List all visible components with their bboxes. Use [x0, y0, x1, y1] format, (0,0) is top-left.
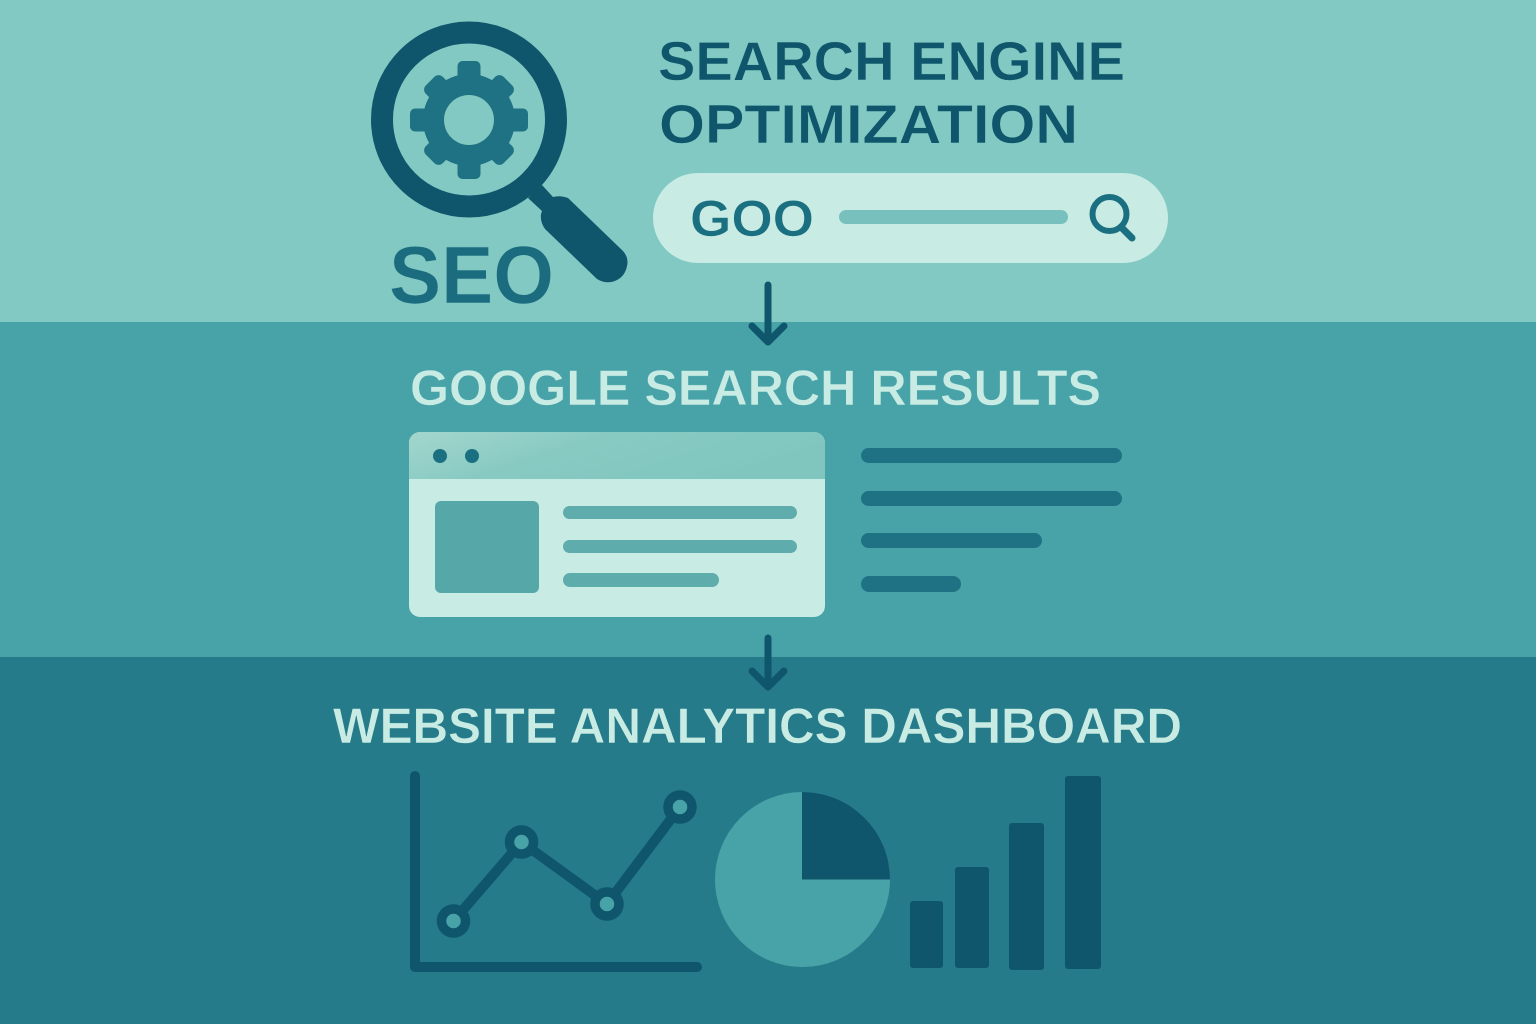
pie chart [715, 792, 890, 967]
arrow: results to analytics [752, 638, 784, 687]
title: search engine optimization: OPTIMIZATION [659, 93, 1078, 155]
bar chart [910, 776, 1101, 970]
text lines: result list [861, 448, 1122, 592]
text: search query: GOO [690, 190, 814, 247]
title: search engine optimization [658, 30, 1125, 155]
text: SEO label: SEO [389, 230, 554, 321]
heading: website analytics dashboard: WEBSITE ANALYTICS DASHBOARD [333, 698, 1182, 754]
browser window [409, 432, 825, 617]
panel: SEO band background [0, 0, 1536, 322]
panel: search results band background [0, 322, 1536, 657]
heading: google search results: GOOGLE SEARCH RESULTS [410, 360, 1101, 416]
icon: search magnifier [1092, 197, 1132, 238]
line chart [415, 776, 697, 967]
icon: magnifying glass with gear [382, 32, 628, 282]
panel: analytics band background [0, 657, 1536, 1024]
arrow: SEO to results [752, 285, 784, 342]
title: search engine optimization: SEARCH ENGINE [658, 30, 1125, 92]
search bar [653, 173, 1168, 263]
icon: gear [410, 61, 528, 179]
